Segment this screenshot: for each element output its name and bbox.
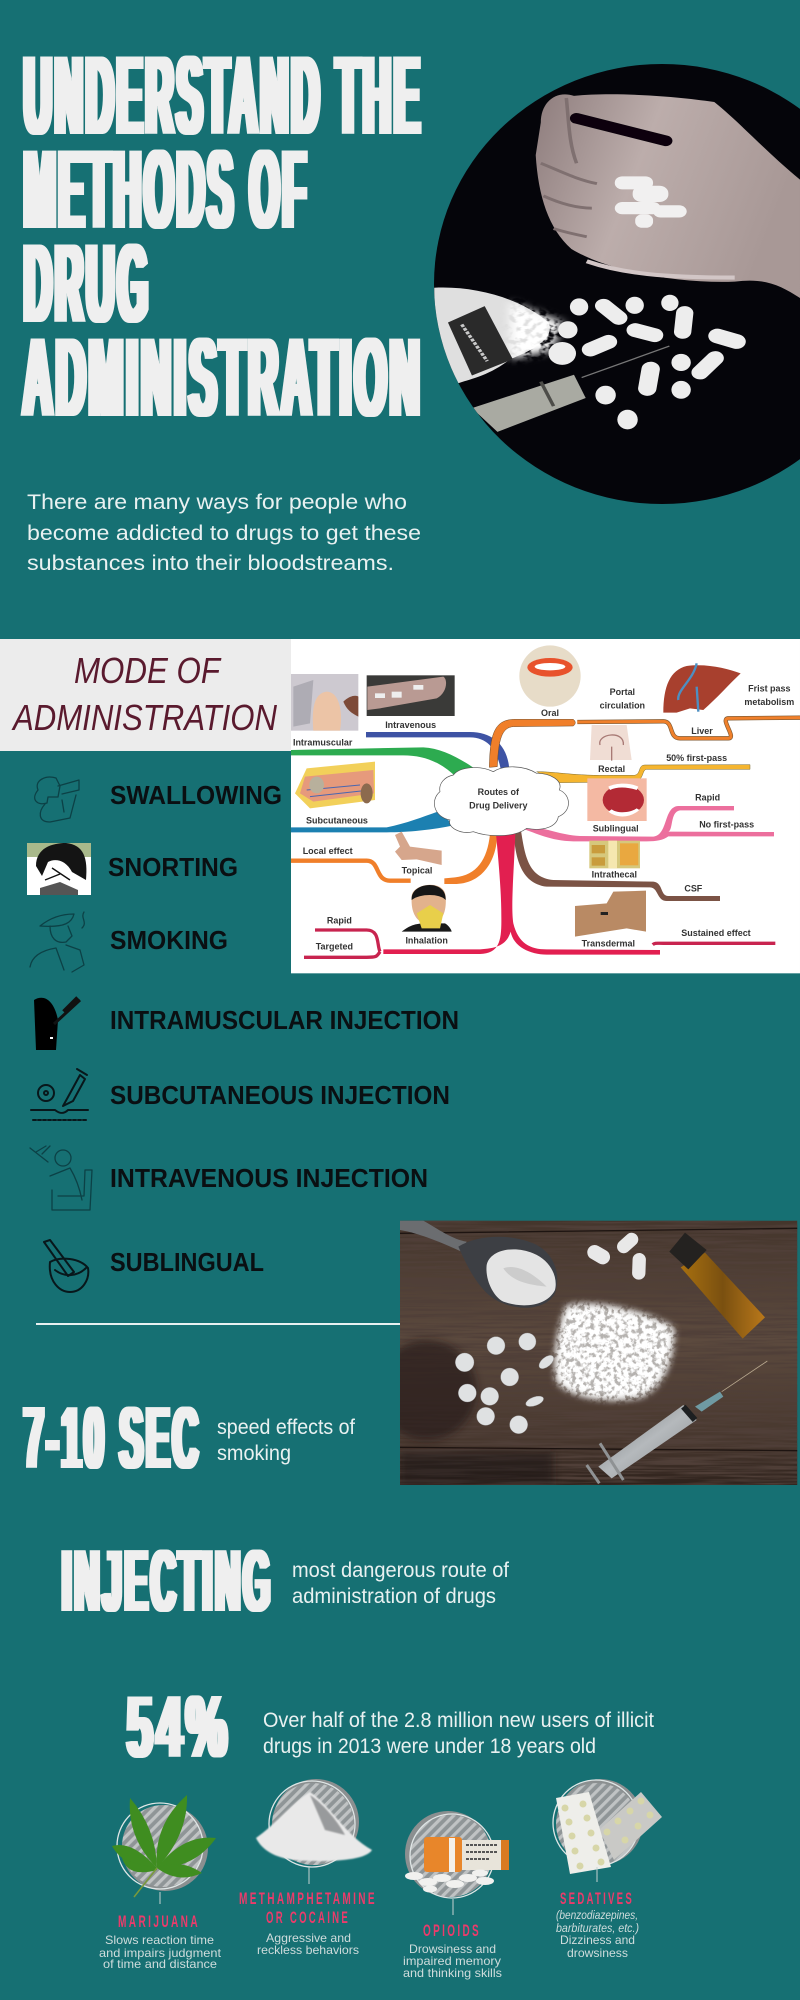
branch: subcutaneous xyxy=(291,812,455,832)
panel: mode of administration heading xyxy=(0,639,291,751)
photo: intramuscular xyxy=(291,674,358,731)
branch: sublingual xyxy=(522,806,774,841)
diagram labels: Sustained effect xyxy=(681,928,751,938)
item: intramuscular injection: INTRAMUSCULAR INJECTION xyxy=(110,1005,459,1035)
intro paragraph xyxy=(27,490,421,575)
card: marijuana: Slows reaction time xyxy=(105,1933,214,1947)
diagram labels: 50% first-pass xyxy=(666,753,727,763)
stat: injecting: administration of drugs xyxy=(292,1584,496,1608)
card: methamphetamine or cocaine xyxy=(239,1779,377,1957)
stat: 7-10 sec: speed effects of xyxy=(217,1415,355,1439)
intro paragraph: become addicted to drugs to get these xyxy=(27,521,421,545)
stat: 54%: 54% xyxy=(127,1677,231,1776)
branch: intrathecal xyxy=(513,828,720,901)
item: subcutaneous injection xyxy=(31,1069,450,1120)
diagram labels xyxy=(293,684,794,951)
icon: syringe entering skin xyxy=(31,1069,88,1120)
branch: topical xyxy=(291,834,497,884)
diagram labels: circulation xyxy=(600,700,645,710)
icon: person swallowing xyxy=(35,777,79,822)
item: swallowing: SWALLOWING xyxy=(110,780,282,810)
spoon xyxy=(400,1221,557,1308)
item: intramuscular injection xyxy=(34,998,459,1050)
stat: 7-10 sec: smoking xyxy=(217,1441,291,1465)
item: smoking xyxy=(30,912,228,972)
title xyxy=(23,33,423,440)
diagram labels: Inhalation xyxy=(405,936,448,946)
diagram labels: Topical xyxy=(402,865,432,875)
intro paragraph: There are many ways for people who xyxy=(27,490,407,514)
icon: striped circle with cannabis leaf xyxy=(112,1795,216,1897)
photo: rectal xyxy=(590,725,632,761)
diagram labels: Rectal xyxy=(598,764,625,774)
diagram labels: Frist pass xyxy=(748,684,791,694)
item: sublingual xyxy=(44,1240,264,1292)
stat: injecting: most dangerous route of xyxy=(292,1558,509,1582)
item: swallowing xyxy=(35,777,282,822)
item: subcutaneous injection: SUBCUTANEOUS INJECTION xyxy=(110,1080,450,1110)
stat: 54%: Over half of the 2.8 million new users of illicit xyxy=(263,1708,654,1732)
item: intravenous injection xyxy=(30,1146,428,1210)
item: snorting xyxy=(27,843,238,895)
central cloud xyxy=(434,767,568,836)
icon: leg with syringe xyxy=(34,998,80,1050)
powder pile on table xyxy=(556,1305,673,1399)
diagram labels: Liver xyxy=(691,726,713,736)
diagram labels: Transdermal xyxy=(582,939,635,949)
photo: mouth xyxy=(519,645,581,707)
central cloud: Drug Delivery xyxy=(469,800,528,810)
capsules xyxy=(585,1230,646,1280)
branch: inhalation and transdermal xyxy=(304,833,775,957)
icon: striped circle with pill bottle xyxy=(405,1811,509,1898)
photo: sublingual xyxy=(587,778,647,821)
card: sedatives xyxy=(553,1779,662,1960)
card: sedatives: SEDATIVES xyxy=(560,1889,634,1908)
intro paragraph: substances into their bloodstreams. xyxy=(27,551,394,575)
photo: transdermal xyxy=(575,891,646,937)
icon: person snorting xyxy=(27,843,91,895)
branch: intramuscular xyxy=(291,747,481,776)
diagram labels: Intravenous xyxy=(385,720,436,730)
card: methamphetamine or cocaine: METHAMPHETAMINE xyxy=(239,1889,377,1908)
diagram labels: Rapid xyxy=(327,915,352,925)
card: sedatives: drowsiness xyxy=(567,1946,628,1960)
diagram labels: Subcutaneous xyxy=(306,815,368,825)
card: sedatives: (benzodiazepines, xyxy=(556,1908,638,1922)
icon: open hand xyxy=(536,94,800,298)
card: methamphetamine or cocaine: reckless behaviors xyxy=(257,1943,359,1957)
card: sedatives: Dizziness and xyxy=(560,1933,635,1947)
diagram labels: No first-pass xyxy=(699,819,754,829)
card: marijuana: of time and distance xyxy=(103,1957,217,1971)
diagram labels: Local effect xyxy=(303,846,353,856)
card: opioids: OPIOIDS xyxy=(423,1921,481,1940)
diagram labels: Intrathecal xyxy=(592,869,637,879)
diagram labels: Intramuscular xyxy=(293,738,353,748)
branch: intravenous xyxy=(366,732,509,773)
stat: 54% xyxy=(127,1677,654,1776)
pills in palm xyxy=(615,176,687,228)
razor blade xyxy=(448,306,513,376)
card: opioids: impaired memory xyxy=(403,1954,501,1968)
icon: mortar and dropper xyxy=(44,1240,88,1292)
diagram labels: CSF xyxy=(684,883,703,893)
diagram labels: Portal xyxy=(610,687,635,697)
diagram labels: Targeted xyxy=(316,941,353,951)
list: methods of administration xyxy=(27,777,459,1292)
round tablets xyxy=(455,1333,556,1434)
photo: intrathecal xyxy=(589,841,640,868)
card: opioids: and thinking skills xyxy=(403,1966,502,1980)
powder pile xyxy=(434,288,550,384)
panel: mode of administration heading: ADMINISTRATION xyxy=(11,697,278,738)
diagram labels: Sublingual xyxy=(593,824,639,834)
stat: injecting: INJECTING xyxy=(62,1531,273,1630)
card: sedatives: barbiturates, etc.) xyxy=(556,1921,639,1935)
photo: intravenous xyxy=(367,675,455,716)
branch: oral xyxy=(489,718,800,767)
card: marijuana xyxy=(99,1795,222,1971)
stat: 54%: drugs in 2013 were under 18 years old xyxy=(263,1734,596,1758)
item: smoking: SMOKING xyxy=(110,925,228,955)
panel: mode of administration heading: MODE OF xyxy=(74,650,222,691)
photo: inhalation face xyxy=(402,885,452,932)
card: methamphetamine or cocaine: Aggressive and xyxy=(266,1931,351,1945)
item: sublingual: SUBLINGUAL xyxy=(110,1247,264,1277)
photo: topical hand xyxy=(395,832,442,865)
icon: striped circle with powder xyxy=(256,1779,372,1867)
syringe xyxy=(472,375,586,432)
hero image: hand, pills, powder and syringe xyxy=(430,60,800,510)
branch: rectal xyxy=(537,765,750,783)
icon: person smoking xyxy=(30,912,84,972)
diagram labels: metabolism xyxy=(744,697,794,707)
title: DRUG xyxy=(24,221,151,346)
diagram labels: Oral xyxy=(541,708,559,718)
card: opioids xyxy=(403,1811,509,1980)
lighter xyxy=(669,1233,765,1339)
card: marijuana: and impairs judgment xyxy=(99,1946,222,1960)
item: snorting: SNORTING xyxy=(108,852,238,882)
icon: seated person injecting xyxy=(30,1146,92,1210)
photo: spoon, powder, pills, lighter and syringe on wood xyxy=(377,1221,797,1485)
syringe xyxy=(587,1361,767,1483)
diagram: routes of drug delivery xyxy=(291,639,800,973)
card: marijuana: MARIJUANA xyxy=(118,1912,200,1931)
item: intravenous injection: INTRAVENOUS INJECTION xyxy=(110,1163,428,1193)
photo: subcutaneous skin xyxy=(295,762,375,808)
card: opioids: Drowsiness and xyxy=(409,1942,496,1956)
central cloud: Routes of xyxy=(478,787,520,797)
diagram labels: Rapid xyxy=(695,792,720,802)
stat: 7-10 sec: 7-10 SEC xyxy=(24,1388,201,1487)
scattered pills xyxy=(548,295,748,429)
icon: striped circle with blister packs xyxy=(553,1779,662,1874)
photo: liver xyxy=(663,663,741,713)
card: methamphetamine or cocaine: OR COCAINE xyxy=(266,1908,350,1927)
